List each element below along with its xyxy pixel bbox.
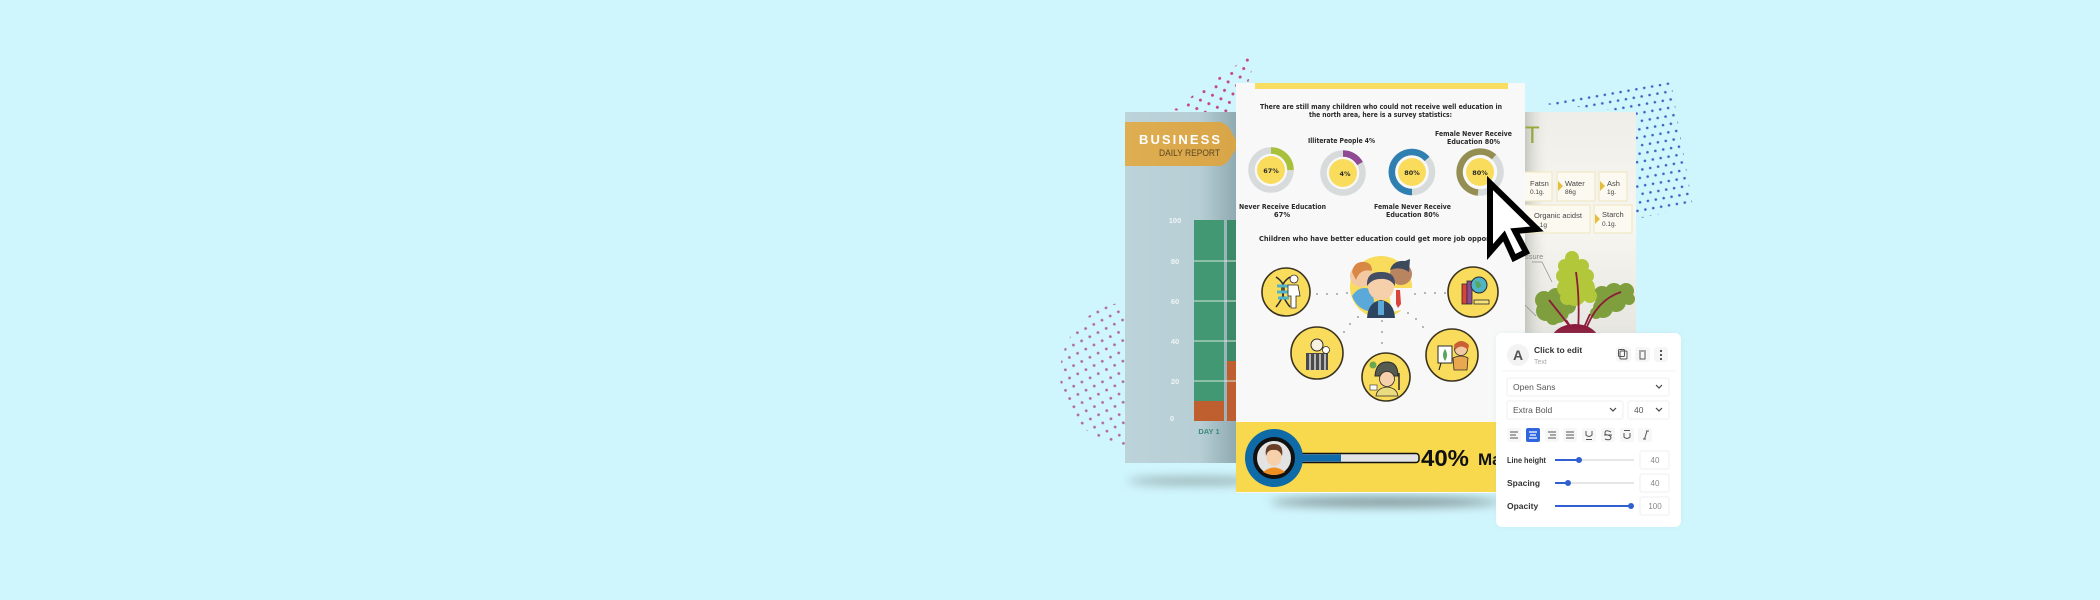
slider: opacity: Opacity	[1507, 501, 1538, 511]
shadow: center card	[1270, 497, 1500, 507]
stacked bar chart: 40	[1171, 337, 1179, 346]
leader lines	[1525, 262, 1552, 316]
percentage: 40%	[1421, 445, 1469, 471]
nutrient box: organic acid: .1g	[1538, 222, 1547, 229]
dot pattern: blue right	[1543, 82, 1693, 219]
label: female top: Education 80%	[1447, 138, 1500, 146]
nutrient box: ash: Ash	[1607, 179, 1620, 188]
intro text: There are still many children who could not receive well education in	[1260, 102, 1502, 111]
header: A	[1513, 347, 1523, 363]
slider: opacity	[1507, 497, 1669, 515]
icon: art teacher	[1426, 329, 1478, 381]
icon: soldier	[1362, 353, 1410, 401]
panel: business daily report	[1125, 112, 1240, 463]
avatar	[1245, 429, 1303, 487]
progress track	[1300, 454, 1419, 462]
panel: text editor	[1496, 333, 1681, 527]
label: pressure: ssure	[1525, 252, 1543, 261]
footer label: Ma	[1478, 450, 1502, 469]
header: Click to edit	[1534, 345, 1582, 355]
slider: spacing: 40	[1651, 479, 1660, 488]
panel: education infographic	[1236, 83, 1525, 493]
donut 2: 4%	[1324, 154, 1362, 192]
banner subtitle: DAILY REPORT	[1159, 148, 1220, 159]
stacked bar chart: 80	[1171, 257, 1179, 266]
dot pattern: pink top	[1172, 50, 1258, 116]
intro text: the north area, here is a survey statistics:	[1309, 110, 1452, 119]
icon: beet plant	[1535, 251, 1635, 358]
label: illiterate people: Illiterate People 4%	[1308, 137, 1375, 145]
dot pattern: pink left circle	[1060, 302, 1130, 446]
shadow: left card	[1127, 477, 1263, 485]
label: female top	[1435, 130, 1512, 146]
slider: opacity: 100	[1648, 502, 1662, 511]
divider	[1502, 370, 1676, 372]
slider: line height: 40	[1651, 456, 1660, 465]
nutrient box: water: 86g	[1565, 189, 1576, 196]
donut 2: 4%: 4%	[1339, 170, 1351, 178]
stacked bar chart: 100	[1169, 216, 1181, 225]
subheading: Children who have better education could get more job opportun	[1259, 234, 1502, 243]
card background	[1236, 83, 1525, 493]
icon: researcher	[1291, 327, 1343, 379]
panel: nutrition card	[1520, 112, 1636, 358]
banner title: BUSINESS	[1139, 132, 1220, 147]
alignment toolbar	[1507, 428, 1652, 442]
intro text	[1260, 102, 1502, 119]
icon: duplicate	[1616, 347, 1631, 362]
slider: spacing	[1507, 474, 1669, 492]
donut 3: 80%	[1392, 152, 1432, 192]
dropdown: font family: Open Sans	[1513, 382, 1556, 392]
dropdown: font family	[1507, 378, 1669, 396]
nutrient box: fatsn: 0.1g.	[1530, 189, 1545, 196]
nutrient box: water: Water	[1565, 179, 1585, 188]
panel background	[1496, 333, 1681, 527]
stacked bar chart: 20	[1171, 377, 1179, 386]
label: never receive: Never Receive Education	[1239, 203, 1326, 211]
card background	[1525, 112, 1636, 337]
top yellow bar	[1255, 83, 1508, 89]
dropdown: font weight	[1507, 401, 1623, 419]
label: female bottom: Education 80%	[1386, 211, 1439, 219]
heading letter: T	[1525, 122, 1540, 149]
nutrient box: starch: 0.1g.	[1602, 221, 1617, 228]
label: female top: Female Never Receive	[1435, 130, 1512, 138]
donut 4: 80%: 80%	[1472, 169, 1488, 177]
header: Text	[1534, 359, 1547, 366]
donut 1: 67%: 67%	[1263, 167, 1279, 175]
label: never receive: 67%	[1274, 211, 1290, 219]
stacked bar chart: 60	[1171, 297, 1179, 306]
footer band	[1236, 422, 1502, 492]
slider: spacing: Spacing	[1507, 478, 1540, 488]
header	[1507, 344, 1582, 366]
nutrient box: starch	[1594, 205, 1632, 233]
slider: line height	[1507, 451, 1669, 469]
nutrient box: water	[1557, 172, 1595, 201]
nutrient box: starch: Starch	[1602, 210, 1624, 219]
donut 3: 80%: 80%	[1404, 169, 1420, 177]
donut 1: 67%	[1252, 150, 1290, 190]
icon: books and globe	[1448, 267, 1498, 317]
label: female bottom: Female Never Receive	[1374, 203, 1451, 211]
banner	[1125, 122, 1236, 166]
icon: people group	[1350, 256, 1412, 318]
stacked bar chart: 0	[1170, 414, 1174, 423]
nutrient box: fatsn: Fatsn	[1530, 179, 1549, 188]
connector dots	[1316, 292, 1446, 344]
stacked bar chart: DAY 1	[1198, 427, 1220, 436]
dropdown: font size	[1628, 401, 1669, 419]
icon: more	[1654, 347, 1668, 362]
donut 4: 80%	[1460, 152, 1500, 192]
dropdown: font weight: Extra Bold	[1513, 405, 1552, 415]
card background	[1125, 112, 1240, 463]
nutrient box: fatsn	[1520, 172, 1552, 201]
stacked bar chart	[1169, 216, 1237, 436]
label: never receive	[1239, 203, 1326, 219]
nutrient box: organic acid: Organic acidst	[1534, 211, 1583, 220]
label: female bottom	[1374, 203, 1451, 219]
icon: dna scientist	[1262, 268, 1310, 316]
nutrient box: ash	[1599, 172, 1627, 201]
icon: cursor arrow	[1490, 183, 1537, 258]
nutrient box: organic acid	[1520, 205, 1590, 233]
slider: line height: Line height	[1507, 455, 1546, 465]
dropdown: font size: 40	[1634, 405, 1644, 415]
icon: trash	[1635, 347, 1650, 362]
nutrient box: ash: 1g.	[1607, 189, 1616, 196]
